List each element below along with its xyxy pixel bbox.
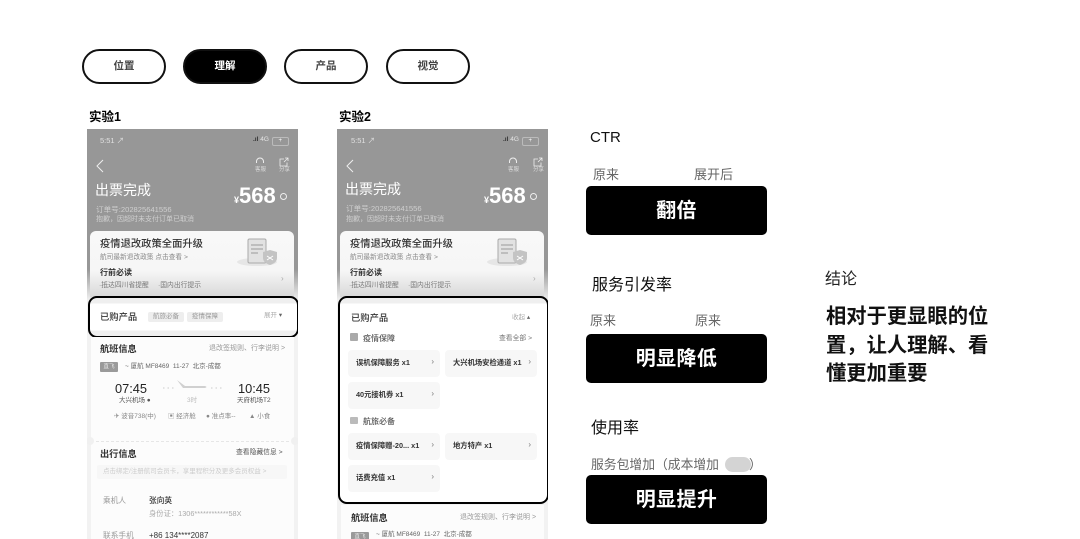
icon: document shield [487, 238, 527, 266]
conclusion label: 结论 [825, 271, 857, 288]
icon: service [509, 158, 517, 163]
tab: 理解 (active): 理解 [214, 60, 236, 72]
tile: 40元接机券: 40元接机券 x1 [356, 390, 403, 399]
member bar [97, 465, 287, 479]
行前必读: 行前必读 [350, 268, 382, 277]
highlight box: expanded purchased products [338, 296, 549, 504]
metric: CTR [586, 129, 767, 235]
icon: gift [350, 333, 358, 341]
status bar: 5:51 ↗ [351, 136, 375, 145]
tile: 话费充值: › [431, 472, 434, 481]
passenger name: 张向英 [149, 496, 172, 505]
card: flight info [341, 505, 544, 539]
badge: direct [351, 532, 369, 539]
amenity: snack: ▲ 小食 [249, 413, 270, 420]
tile: 40元接机券: › [431, 389, 434, 398]
metric title: CTR [590, 129, 621, 146]
order number: 订单号:202825641556 [96, 205, 172, 214]
label: 客服: 客服 [508, 167, 519, 173]
tile: 疫情保障赠: 疫情保障赠-20... x1 [356, 441, 419, 450]
purchased title: 已购产品 [351, 313, 388, 323]
travel title: 出行信息 [100, 449, 137, 459]
conclusion text: 懂更加重要 [826, 363, 927, 385]
amenities: ✈ 波音738(中) [114, 413, 156, 420]
title: 出票完成: 出票完成 [345, 181, 401, 197]
arrival airport: 天府机场T2 [237, 397, 271, 404]
label: 客服: 客服 [255, 167, 266, 173]
group title: 航旅必备: 航旅必备 [363, 417, 395, 426]
tile: 疫情保障赠 [348, 433, 440, 460]
departure airport: 大兴机场 ● [119, 397, 151, 404]
tile: 误机保障服务: 误机保障服务 x1 [356, 358, 410, 367]
status bar: 5:51 ↗ [100, 136, 124, 145]
icon: info circle [530, 193, 537, 200]
flight rules link: 退改签规则、行李说明 > [209, 345, 285, 352]
icon: bag [350, 417, 358, 424]
expand toggle: 展开 ▾ [264, 312, 282, 319]
result: 翻倍: 翻倍 [656, 200, 697, 222]
icon: share [280, 158, 288, 166]
tile: 地方特产 [445, 433, 537, 460]
plane graphic [163, 380, 222, 388]
tab row [82, 49, 470, 84]
label: 原来: 原来 [695, 313, 721, 328]
heading: 实验1: 实验1 [89, 110, 121, 124]
icon: service [256, 158, 264, 163]
icon: document shield [237, 238, 277, 266]
tag: 航旅必备 [148, 312, 184, 322]
tab: 位置: 位置 [114, 60, 134, 72]
tip one: ·抵达四川省提醒 [99, 282, 149, 289]
heading: 实验2: 实验2 [339, 110, 371, 124]
travel link: 查看隐藏信息 > [236, 449, 283, 456]
tab: 视觉 [386, 49, 470, 84]
tip two: ·国内出行提示 [408, 282, 451, 289]
status icons: .ıl 4G [253, 136, 269, 143]
flight title: 航班信息 [100, 344, 137, 354]
purchased title: 已购产品 [100, 312, 137, 322]
arrival time: 10:45 [238, 381, 270, 396]
tip two: ·国内出行提示 [158, 282, 201, 289]
result: 明显降低 [586, 334, 767, 383]
icon: back chevron [96, 160, 104, 172]
result: 翻倍 [586, 186, 767, 235]
policy subtitle: 航司最新退改政策 点击查看 > [350, 254, 438, 261]
amenity: on-time: ● 准点率-- [206, 413, 236, 420]
badge: direct [100, 362, 118, 372]
badge: direct: 直飞 [103, 364, 114, 370]
policy title: 疫情退改政策全面升级 [100, 239, 203, 250]
label: service package: 服务包增加（成本增加 [591, 457, 719, 472]
tile: 话费充值: 话费充值 x1 [356, 473, 395, 482]
tile: 误机保障服务: › [431, 357, 434, 366]
tab: 产品: 产品 [316, 60, 336, 72]
label: 分享: 分享 [279, 167, 290, 173]
card: flight info [91, 337, 294, 539]
icon: back chevron [346, 160, 354, 172]
card: policy notice [340, 231, 544, 297]
label: 原来: 原来 [590, 313, 616, 328]
tile: 大兴机场安检通道 [445, 350, 537, 377]
redacted pill [725, 457, 751, 472]
order notice: 抱歉，因超时未支付订单已取消 [346, 216, 444, 223]
label: 展开后: 展开后 [694, 167, 733, 182]
icon: chevron: › [281, 274, 284, 283]
passenger label: 乘机人 [103, 496, 126, 505]
status icons: + [528, 138, 532, 144]
tile: 40元接机券 [348, 382, 440, 409]
group title: 疫情保障: 疫情保障 [363, 334, 395, 343]
card: policy notice [90, 231, 294, 297]
amenity: cabin: ▣ 经济舱 [168, 413, 196, 420]
tab: 产品 [284, 49, 368, 84]
metric: service trigger rate [586, 276, 767, 383]
status icons: + [278, 138, 282, 144]
result: 明显提升: 明显提升 [636, 489, 717, 511]
metric title: 使用率 [591, 420, 639, 437]
tab: 视觉: 视觉 [418, 60, 438, 72]
conclusion [825, 270, 988, 385]
label: 原来: 原来 [593, 167, 619, 182]
tile: 误机保障服务 [348, 350, 440, 377]
order number: 订单号:202825641556 [346, 204, 422, 213]
duration: 3时 [187, 397, 197, 404]
view all link: 查看全部 > [499, 335, 532, 342]
result: 明显降低: 明显降低 [636, 348, 717, 370]
tip one: ·抵达四川省提醒 [349, 282, 399, 289]
departure time: 07:45 [115, 381, 147, 396]
phone: experiment 1 [87, 129, 298, 539]
conclusion text: 相对于更显眼的位 [826, 306, 988, 328]
行前必读: 行前必读 [100, 268, 132, 277]
tab: 理解 (active) [183, 49, 267, 84]
collapse toggle: 收起 ▴ [512, 314, 530, 321]
status icons: .ıl 4G [503, 136, 519, 143]
status icons [503, 136, 539, 146]
conclusion text [826, 305, 988, 385]
price: ¥568 [234, 183, 276, 208]
icon: chevron: › [533, 274, 536, 283]
tag: 航旅必备: 航旅必备 [153, 313, 179, 320]
tab: 位置 [82, 49, 166, 84]
tile: 地方特产: › [528, 440, 531, 449]
tile: 地方特产: 地方特产 x1 [453, 441, 492, 450]
notch right [291, 437, 299, 445]
phone: experiment 2 [337, 129, 548, 539]
notch left [86, 437, 94, 445]
flight title: 航班信息 [351, 513, 388, 523]
order notice: 抱歉，因超时未支付订单已取消 [96, 216, 194, 223]
closing bracket: ） [749, 457, 762, 472]
label: 分享: 分享 [533, 167, 544, 173]
icon: info circle [280, 193, 287, 200]
tag: 疫情保障: 疫情保障 [192, 313, 218, 320]
metric title: 服务引发率 [592, 277, 672, 294]
icon: share [534, 158, 542, 166]
flight rules link: 退改签规则、行李说明 > [460, 514, 536, 521]
tile: 大兴机场安检通道: › [528, 357, 531, 366]
highlight box: purchased products [88, 296, 299, 338]
metric: usage rate [586, 419, 767, 524]
title: 出票完成: 出票完成 [95, 182, 151, 198]
conclusion text: 置，让人理解、看 [826, 334, 988, 356]
tag: 疫情保障 [187, 312, 223, 322]
policy title: 疫情退改政策全面升级 [350, 239, 453, 250]
price: ¥568 [484, 183, 526, 208]
tile: 话费充值 [348, 465, 440, 492]
result: 明显提升 [586, 475, 767, 524]
flight number: ~ 厦航 MF8469 11-27 北京-成都 [376, 531, 472, 538]
passenger id: 身份证：1306************58X [149, 509, 241, 518]
tile: 大兴机场安检通道: 大兴机场安检通道 x1 [453, 358, 522, 367]
member bar: 点击绑定/注册航司会员卡，享里程积分及更多会员权益 > [103, 468, 266, 475]
tile: 疫情保障赠: › [431, 440, 434, 449]
flight number: ~ 厦航 MF8469 11-27 北京-成都 [125, 363, 221, 370]
policy subtitle: 航司最新退改政策 点击查看 > [100, 254, 188, 261]
status icons [253, 136, 289, 146]
